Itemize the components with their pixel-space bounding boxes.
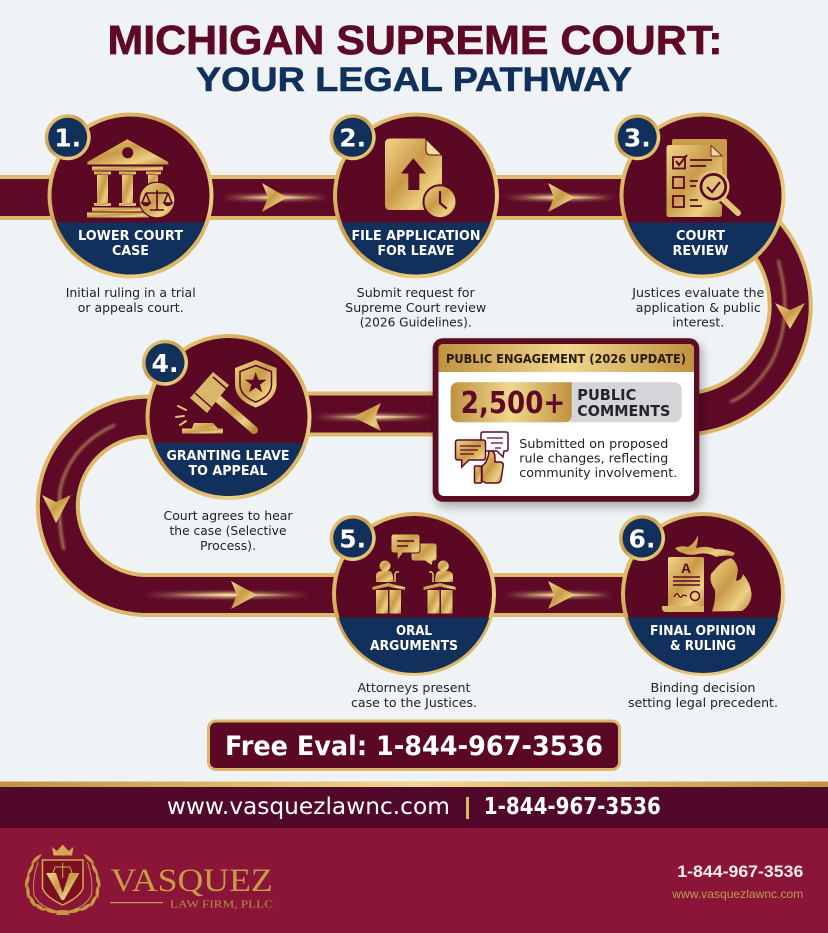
step 4 description: Process). — [200, 538, 256, 553]
contact bar: 1-844-967-3536 — [484, 794, 661, 820]
footer contact: 1-844-967-3536 — [677, 863, 803, 881]
shield V — [46, 873, 80, 900]
title — [108, 17, 722, 99]
arrow: curve down from step 3 — [730, 260, 805, 402]
step 4 number badge: 4. — [152, 349, 178, 378]
step 2 description: Submit request for — [357, 285, 476, 300]
footer contact — [671, 863, 803, 901]
step 2 description: (2026 Guidelines). — [360, 314, 472, 330]
step 2 label: FOR LEAVE — [378, 243, 454, 259]
panel description — [519, 436, 677, 480]
step 5 number badge — [330, 515, 376, 561]
panel description: rule changes, reflecting — [519, 450, 668, 466]
arrow: panel to step 4 — [315, 403, 432, 431]
step 3 label — [672, 228, 729, 259]
icon: two attorneys at podiums with speech bubbles — [372, 534, 456, 614]
step 3 description: application & public — [636, 300, 761, 315]
arrow: step 2 to 3 — [505, 183, 615, 212]
icon: gavel and shield — [176, 360, 276, 434]
contact bar: www.vasquezlawnc.com — [167, 794, 450, 820]
step 5 label — [370, 623, 458, 654]
step 5 medallion — [330, 512, 496, 678]
panel description: community involvement. — [519, 465, 677, 480]
stat: 2,500+ public comments: PUBLIC — [577, 386, 636, 404]
footer band — [0, 828, 828, 933]
step 4 label — [166, 448, 290, 479]
shield scales — [53, 863, 72, 878]
call to action button: Free Eval: 1-844-967-3536 — [225, 731, 603, 762]
icon: document upload with clock — [385, 138, 456, 218]
step 6 description: setting legal precedent. — [628, 695, 778, 710]
step 5 label: ORAL — [396, 623, 432, 639]
step 2 label: FILE APPLICATION — [352, 228, 480, 244]
step 6 label: FINAL OPINION — [650, 623, 756, 639]
footer contact: www.vasquezlawnc.com — [671, 887, 803, 901]
shield — [42, 860, 83, 905]
logo: wordmark: VASQUEZ — [111, 863, 273, 899]
step 5 description — [351, 680, 477, 710]
step 2 medallion — [330, 112, 499, 282]
logo: wordmark — [110, 863, 273, 910]
step 3 description: Justices evaluate the — [631, 285, 765, 300]
step 4 description — [164, 508, 293, 553]
step 5 description: Attorneys present — [358, 680, 471, 695]
step 3 description — [631, 285, 765, 330]
contact bar — [0, 782, 828, 828]
step 6 label: & RULING — [670, 638, 736, 654]
step 2 number badge: 2. — [339, 124, 366, 152]
crown — [52, 844, 74, 856]
step 1 description: Initial ruling in a trial — [66, 285, 196, 300]
step 6 number badge: 6. — [629, 524, 655, 554]
step 4 description: the case (Selective — [170, 523, 287, 538]
step 3 label: COURT — [676, 228, 726, 244]
step 1 number badge: 1. — [54, 124, 81, 152]
step 3 number badge: 3. — [624, 124, 651, 152]
step 2 label — [352, 228, 480, 259]
panel: public engagement — [433, 338, 699, 502]
step 4 label: GRANTING LEAVE — [166, 448, 290, 464]
icon: decree scroll and Michigan map: A — [681, 560, 691, 576]
step 5 description: case to the Justices. — [351, 695, 477, 710]
step 5 number badge: 5. — [339, 524, 366, 554]
logo: wordmark: LAW FIRM, PLLC — [170, 898, 273, 910]
arrow: lower track to step 5 — [145, 581, 310, 609]
step 1 label: LOWER COURT — [78, 228, 184, 244]
serpentine pathway track — [0, 198, 790, 595]
step 6 medallion — [619, 512, 785, 678]
step 1 description: or appeals court. — [78, 300, 184, 315]
icon: comment bubbles and thumbs up — [456, 432, 508, 483]
icon: decree scroll and Michigan map — [662, 535, 752, 612]
panel heading: PUBLIC ENGAGEMENT (2026 UPDATE) — [446, 352, 686, 366]
panel heading — [438, 344, 694, 372]
step 1 medallion — [45, 112, 214, 282]
call to action button — [207, 720, 621, 771]
step 3 description: interest. — [672, 314, 724, 330]
stat: 2,500+ public comments — [451, 382, 682, 422]
step 1 description — [66, 285, 196, 315]
step 6 description: Binding decision — [650, 680, 756, 695]
step 1 number badge — [45, 114, 91, 160]
step 3 number badge — [614, 114, 660, 160]
step 2 number badge — [330, 114, 376, 160]
logo: crest — [25, 844, 101, 915]
arrow: step 1 to 2 — [222, 183, 328, 212]
step 4 description: Court agrees to hear — [164, 508, 293, 523]
left laurel — [25, 854, 70, 915]
arrow: step 5 to 6 — [505, 581, 612, 609]
step 6 description — [628, 680, 778, 710]
step 4 number badge — [142, 340, 188, 386]
panel description: Submitted on proposed — [519, 436, 668, 451]
step 5 label: ARGUMENTS — [370, 638, 458, 654]
title: MICHIGAN SUPREME COURT: — [108, 17, 722, 63]
icon: courthouse with scales — [87, 139, 176, 218]
step 4 medallion — [142, 334, 312, 503]
step 6 number badge — [619, 515, 665, 561]
arrow: curve down from step 4 — [42, 425, 115, 550]
step 2 description — [345, 285, 486, 330]
step 6 label — [650, 623, 756, 654]
title: YOUR LEGAL PATHWAY — [196, 61, 632, 99]
stat: 2,500+ public comments: COMMENTS — [577, 402, 670, 420]
step 2 description: Supreme Court review — [345, 300, 486, 315]
step 4 label: TO APPEAL — [188, 463, 268, 479]
right laurel — [55, 854, 101, 915]
step 1 label — [78, 228, 184, 259]
step 3 label: REVIEW — [672, 243, 729, 259]
stat: 2,500+ public comments: 2,500+ — [461, 386, 565, 421]
step 3 medallion — [614, 112, 786, 282]
icon: checklist with magnifier — [666, 139, 739, 217]
step 1 label: CASE — [112, 243, 149, 259]
